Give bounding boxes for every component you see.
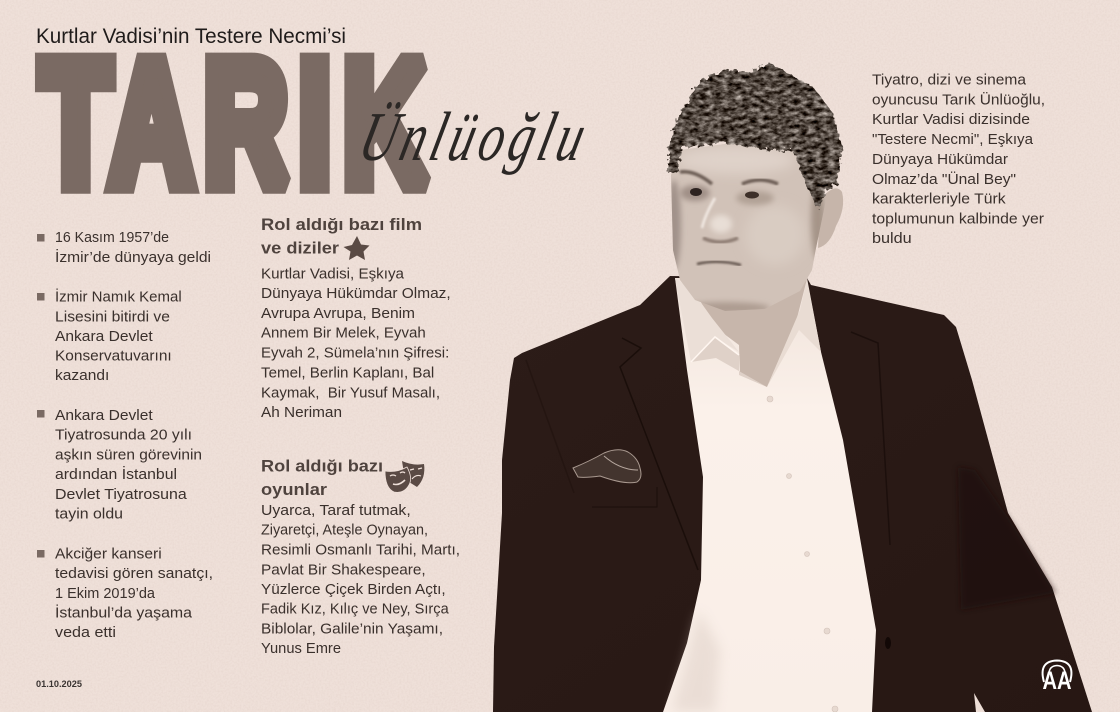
bullet: education: Ankara Devlet	[55, 329, 153, 345]
subtitle: Kurtlar Vadisi’nin Testere Necmi’si	[36, 25, 346, 48]
film list: Kaymak, Bir Yusuf Masalı,	[261, 385, 440, 401]
bullet: death: 1 Ekim 2019’da	[55, 586, 156, 602]
film list	[261, 266, 451, 421]
title: TARIK: TARIK	[40, 24, 427, 221]
play list	[261, 503, 460, 657]
heading: films	[261, 215, 422, 257]
bullet: career: Tiyatrosunda 20 yılı	[55, 428, 192, 444]
bullet: career: tayin oldu	[55, 506, 123, 522]
bullet: death: İstanbul’da yaşama	[55, 604, 193, 622]
bullet: death: Akciğer kanseri	[55, 546, 162, 562]
play list: Uyarca, Taraf tutmak,	[261, 503, 411, 519]
shirt	[663, 278, 876, 712]
play list: Ziyaretçi, Ateşle Oynayan,	[261, 523, 428, 539]
collars	[675, 278, 821, 387]
heading: films: ve diziler	[261, 238, 339, 257]
play list: Pavlat Bir Shakespeare,	[261, 562, 426, 578]
buttons	[767, 396, 838, 712]
bullet: career: aşkın süren görevinin	[55, 447, 202, 463]
bullet: career	[37, 408, 202, 522]
bullet: death: veda etti	[55, 625, 116, 641]
heading: plays	[261, 457, 383, 499]
intro text block: oyuncusu Tarık Ünlüoğlu,	[872, 90, 1045, 108]
date: 01.10.2025	[36, 679, 83, 690]
play list: Resimli Osmanlı Tarihi, Martı,	[261, 542, 460, 558]
bullet: education: Konservatuvarını	[55, 348, 172, 364]
bullet: birth	[37, 230, 211, 266]
film list: Temel, Berlin Kaplanı, Bal	[261, 365, 434, 381]
bullet: education: İzmir Namık Kemal	[55, 288, 182, 306]
jacket button	[885, 637, 891, 649]
icon: star	[344, 236, 370, 260]
intro text block: Kurtlar Vadisi dizisinde	[872, 112, 1030, 128]
intro text block: toplumunun kalbinde yer	[872, 211, 1044, 227]
panel: films and series	[261, 215, 451, 421]
bullet: death: tedavisi gören sanatçı,	[55, 566, 213, 582]
bullet: birth: 16 Kasım 1957’de	[55, 230, 169, 246]
film list: Annem Bir Melek, Eyvah	[261, 326, 426, 342]
panel: plays	[261, 457, 460, 657]
title: Ünlüoğlu script: Ünlüoğlu	[352, 99, 593, 176]
bullet: education	[37, 288, 182, 384]
intro text block: Olmaz’da "Ünal Bey"	[872, 170, 1016, 188]
biography bullet list	[37, 230, 213, 641]
bullet: death	[37, 546, 213, 641]
heading: plays: Rol aldığı bazı	[261, 457, 383, 476]
neck	[695, 275, 808, 387]
portrait illustration	[493, 63, 1092, 712]
jacket	[493, 276, 1092, 712]
heading: films: Rol aldığı bazı film	[261, 215, 422, 234]
bullet: birth: İzmir’de dünyaya geldi	[55, 248, 211, 266]
film list: Dünyaya Hükümdar Olmaz,	[261, 286, 451, 302]
play list: Yunus Emre	[261, 641, 341, 657]
pocket square	[573, 450, 641, 483]
hair	[668, 63, 842, 208]
bullet: career: Devlet Tiyatrosuna	[55, 487, 188, 503]
film list: Avrupa Avrupa, Benim	[261, 306, 415, 322]
ear	[818, 188, 843, 248]
film list: Kurtlar Vadisi, Eşkıya	[261, 266, 405, 282]
AA logo	[1042, 660, 1072, 695]
film list: Eyvah 2, Sümela’nın Şifresi:	[261, 346, 449, 362]
intro text block: karakterleriyle Türk	[872, 192, 1006, 208]
intro text block	[872, 72, 1045, 247]
play list: Fadik Kız, Kılıç ve Ney, Sırça	[261, 602, 450, 618]
bullet: career: Ankara Devlet	[55, 408, 153, 424]
heading: plays: oyunlar	[261, 480, 327, 499]
intro text block: Dünyaya Hükümdar	[872, 152, 1008, 168]
play list: Biblolar, Galile’nin Yaşamı,	[261, 621, 443, 637]
shirt lower shadow	[672, 610, 720, 712]
AA logo: AA	[1042, 667, 1072, 695]
film list: Ah Neriman	[261, 405, 342, 421]
bullet: education: Lisesini bitirdi ve	[55, 309, 170, 325]
icon: theatre masks	[385, 461, 424, 492]
intro text block: buldu	[872, 231, 912, 247]
play list: Yüzlerce Çiçek Birden Açtı,	[261, 582, 446, 598]
intro text block: "Testere Necmi", Eşkıya	[872, 132, 1034, 148]
face	[667, 138, 826, 314]
bullet: education: kazandı	[55, 368, 109, 384]
intro text block: Tiyatro, dizi ve sinema	[872, 72, 1027, 88]
bullet: career: ardından İstanbul	[55, 465, 177, 483]
